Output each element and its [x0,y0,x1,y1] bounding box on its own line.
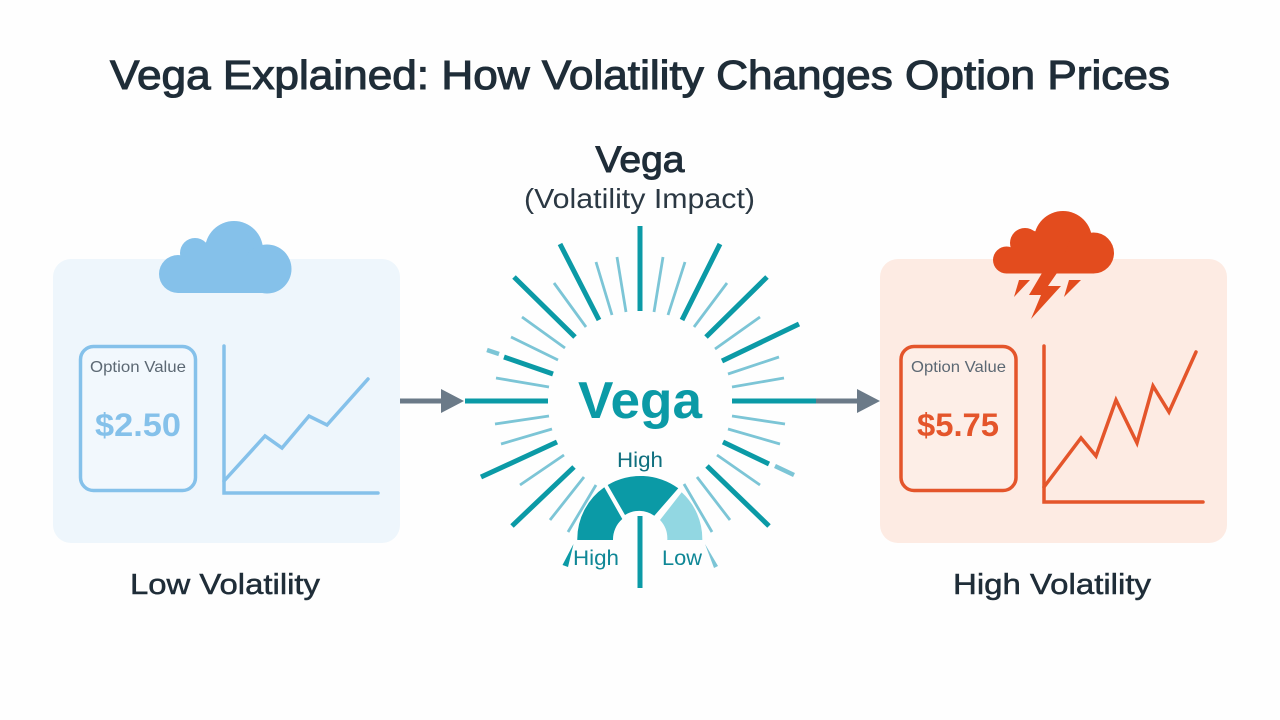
heading: vega: Vega [596,139,685,180]
icon: storm cloud [993,211,1114,319]
line chart: high volatility [1044,346,1203,502]
title: Vega Explained: How Volatility Changes Option Prices [110,52,1170,98]
option value card: low: Option Value [90,359,186,376]
gauge label: left high: High [573,547,619,570]
gauge label: right low: Low [662,547,703,570]
label: high volatility: High Volatility [953,569,1152,601]
icon: cloud [159,221,292,294]
panel: low volatility [53,221,400,543]
option value card: low: $2.50 [95,407,181,443]
center label: vega: Vega [578,372,703,430]
arrow: left [400,389,464,413]
option value card: high: Option Value [911,359,1006,376]
option value card: high [901,346,1016,490]
subheading: volatility impact: (Volatility Impact) [524,183,755,214]
gauge [573,449,703,570]
option value card: low [80,346,196,490]
vega burst rays [465,226,816,588]
arrow: right [816,389,880,413]
option value card: high: $5.75 [917,407,999,443]
line chart: low volatility [224,346,378,493]
gauge label: top high: High [617,449,663,472]
panel: high volatility [880,211,1227,543]
label: low volatility: Low Volatility [130,569,321,601]
